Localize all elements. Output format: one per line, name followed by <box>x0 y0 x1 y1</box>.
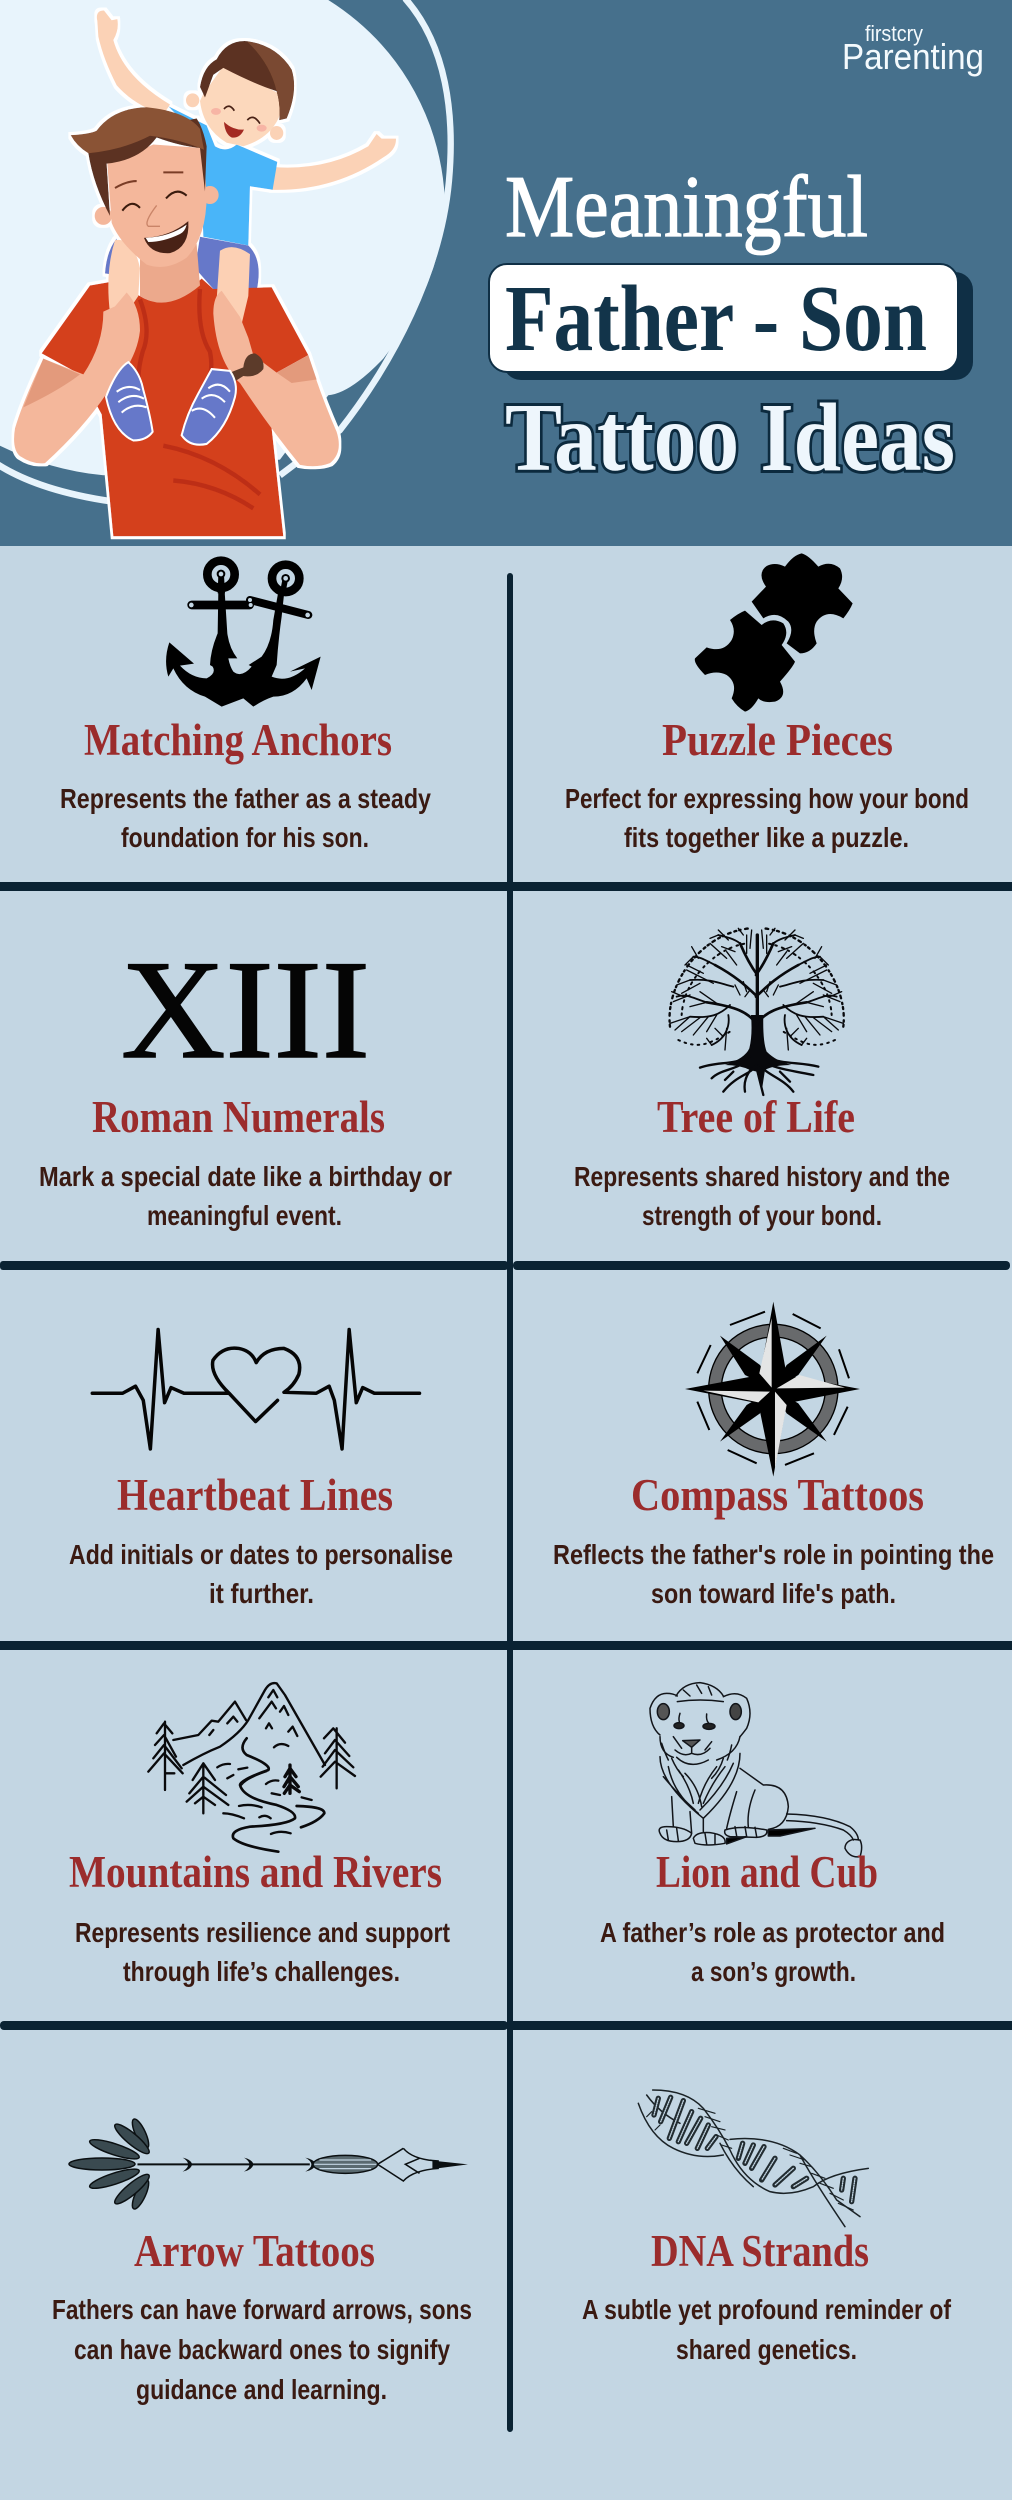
heading: Arrow Tattoos <box>134 2226 375 2276</box>
illustration: father carrying son <box>14 10 396 536</box>
description <box>565 783 969 853</box>
circle backdrop <box>0 0 451 501</box>
description: a son’s growth. <box>691 1956 856 1987</box>
heading: Heartbeat Lines <box>117 1470 393 1520</box>
father's right arm <box>213 291 339 466</box>
description: Represents the father as a steady <box>60 783 431 814</box>
title line: Tattoo Ideas: Tattoo Ideas <box>505 384 955 491</box>
heading: Mountains and Rivers <box>69 1847 442 1897</box>
icon: tree <box>670 928 844 1095</box>
heading: Tree of Life <box>657 1092 855 1142</box>
description: shared genetics. <box>676 2334 857 2365</box>
panel: Puzzle Pieces <box>565 553 969 853</box>
feather fan <box>69 2117 152 2211</box>
description <box>600 1917 945 1987</box>
panel: Heartbeat Lines <box>69 1330 453 1609</box>
heading: DNA Strands <box>651 2226 869 2276</box>
logo: firstcry <box>865 21 923 46</box>
panel: DNA Strands <box>582 2090 952 2365</box>
heading: Puzzle Pieces <box>662 715 893 765</box>
description <box>39 1161 452 1231</box>
grid dividers <box>0 573 1012 2432</box>
watch <box>230 353 264 382</box>
son's head <box>186 41 294 146</box>
description: foundation for his son. <box>121 822 369 853</box>
son's outstretched arm <box>272 134 396 190</box>
description: fits together like a puzzle. <box>624 822 909 853</box>
father's left arm <box>14 292 140 463</box>
logo: Parenting <box>842 36 984 77</box>
icon: puzzle <box>695 553 853 712</box>
title line: Meaningful: Meaningful <box>505 159 868 256</box>
description: Represents resilience and support <box>75 1917 450 1948</box>
icon: arrow <box>69 2117 468 2211</box>
shirt folds <box>139 289 260 508</box>
logo <box>842 21 984 77</box>
description: guidance and learning. <box>136 2374 387 2405</box>
heading: Matching Anchors <box>84 715 392 765</box>
description <box>60 783 431 853</box>
shaft and head <box>137 2148 468 2181</box>
description <box>582 2294 952 2365</box>
panel: Roman Numerals <box>39 932 452 1231</box>
description: Add initials or dates to personalise <box>69 1539 453 1570</box>
panel: Arrow Tattoos <box>52 2117 472 2405</box>
heading: Compass Tattoos <box>631 1470 924 1520</box>
description: son toward life's path. <box>651 1578 896 1609</box>
heading: Roman Numerals <box>92 1092 385 1142</box>
heading: Lion and Cub <box>656 1847 878 1897</box>
father's head <box>71 107 219 267</box>
icon: mountains <box>148 1683 355 1852</box>
description: Fathers can have forward arrows, sons <box>52 2294 472 2325</box>
panel: Compass Tattoos <box>553 1302 994 1609</box>
description <box>75 1917 450 1987</box>
son's t-shirt <box>168 106 277 245</box>
father's neck <box>140 244 200 303</box>
description: can have backward ones to signify <box>74 2334 450 2365</box>
description: A father’s role as protector and <box>600 1917 945 1948</box>
icon: compass <box>685 1302 860 1477</box>
father's shirt <box>42 279 308 536</box>
description: meaningful event. <box>147 1200 342 1231</box>
panel: header <box>0 0 1012 546</box>
panel: Mountains and Rivers <box>69 1683 450 1987</box>
panel: Tree of Life <box>574 928 950 1231</box>
icon: XIII: XIII <box>121 932 370 1088</box>
description <box>69 1539 453 1609</box>
panel: Matching Anchors <box>60 561 431 853</box>
son's raised arm <box>97 10 170 115</box>
icon: heartbeat <box>92 1330 420 1449</box>
panel: Lion and Cub <box>600 1683 945 1987</box>
shoe right <box>182 369 236 445</box>
description <box>553 1539 994 1609</box>
description: it further. <box>209 1578 314 1609</box>
description: strength of your bond. <box>642 1200 882 1231</box>
description: through life’s challenges. <box>123 1956 400 1987</box>
icon: dna <box>638 2090 868 2227</box>
icon: lion <box>650 1683 862 1857</box>
shoe left <box>106 362 153 440</box>
description <box>574 1161 950 1231</box>
son's shorts <box>105 237 259 291</box>
description <box>52 2294 472 2405</box>
title box: Father - Son: Father - Son <box>505 267 927 371</box>
panel: background <box>0 546 1012 2500</box>
son's legs <box>108 240 250 324</box>
icon: anchors <box>166 561 321 707</box>
description: Mark a special date like a birthday or <box>39 1161 452 1192</box>
